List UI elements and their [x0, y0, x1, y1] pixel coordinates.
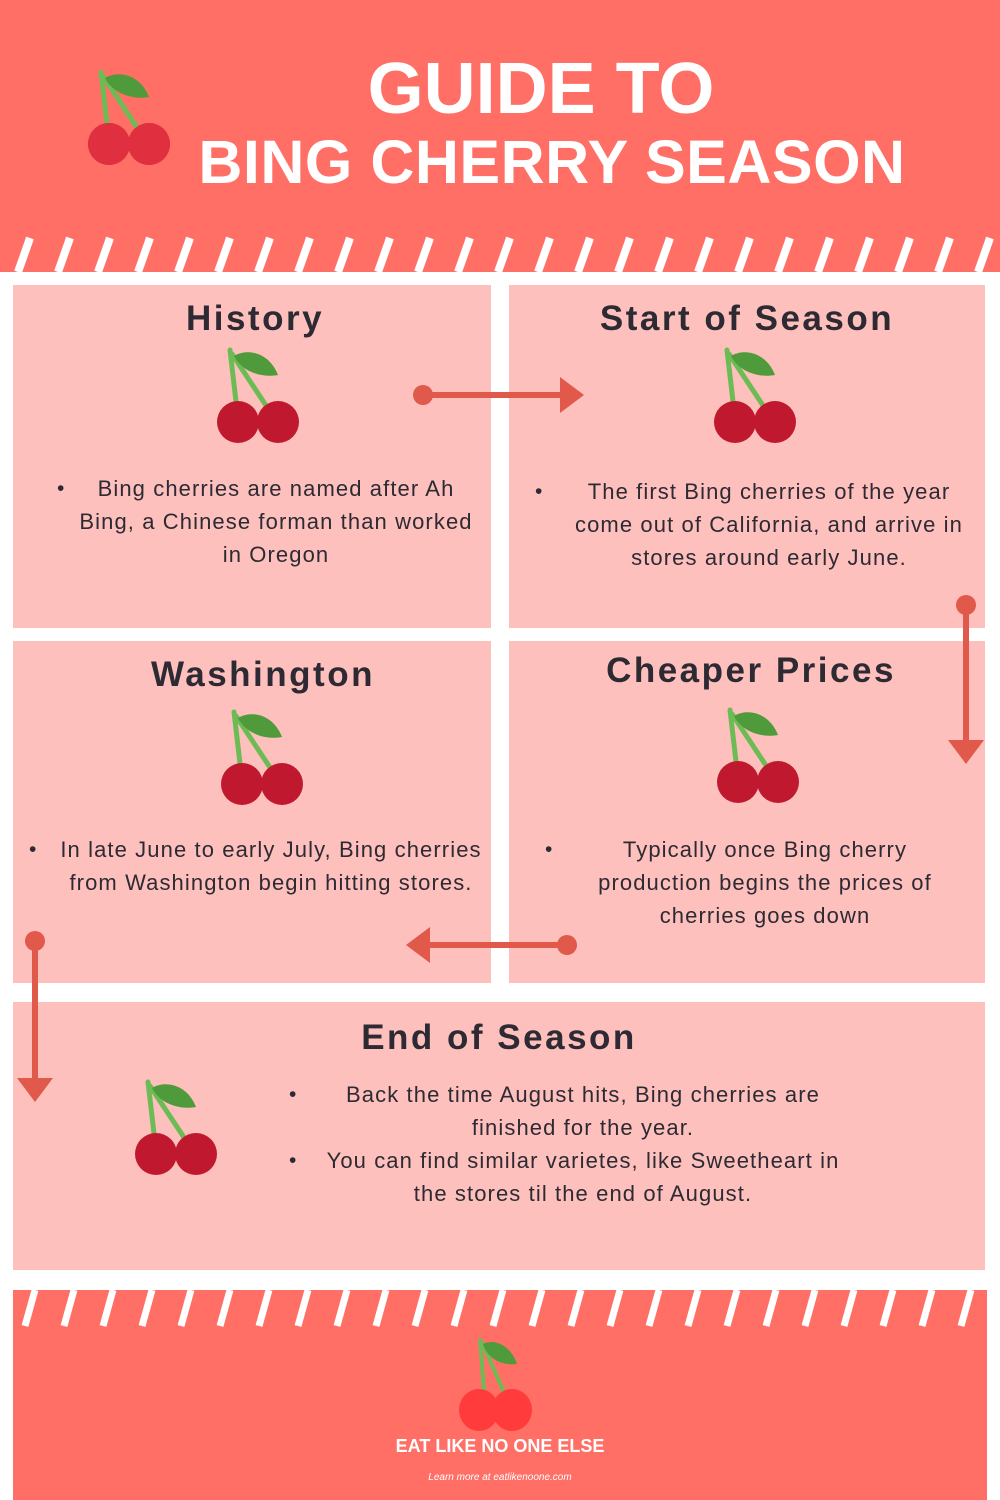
- heading: start of season: Start of Season: [600, 299, 894, 338]
- footer brand: EAT LIKE NO ONE ELSE: [396, 1436, 604, 1456]
- text: washington: from Washington begin hitting stores.: [69, 870, 473, 895]
- text: start: stores around early June.: [631, 545, 907, 570]
- panel: washington: [13, 641, 491, 983]
- icon: cherry: [217, 348, 299, 443]
- footer: [13, 1290, 987, 1500]
- text: cheaper: Typically once Bing cherry: [623, 837, 907, 862]
- icon: footer cherry: [459, 1338, 532, 1431]
- text: start: come out of California, and arrive in: [575, 512, 963, 537]
- text: history: Bing cherries are named after Ah: [98, 476, 454, 501]
- title: GUIDE TO: [368, 49, 714, 129]
- text: history: Bing, a Chinese forman than worked: [79, 509, 473, 534]
- text: start: The first Bing cherries of the year: [588, 479, 950, 504]
- text: history: •: [57, 477, 64, 500]
- text: cheaper: •: [545, 838, 552, 861]
- text: washington: In late June to early July, Bing cherries: [60, 837, 482, 862]
- text: cheaper: cherries goes down: [660, 903, 870, 928]
- text: end of season: finished for the year.: [472, 1115, 694, 1140]
- header: [0, 0, 1000, 272]
- heading: end of season: End of Season: [361, 1018, 637, 1057]
- icon: cherry: [717, 708, 799, 803]
- panel: cheaper prices: [509, 641, 985, 983]
- heading: history: History: [186, 299, 324, 338]
- footer link: Learn more at eatlikenoone.com: [428, 1472, 572, 1483]
- heading: cheaper prices: Cheaper Prices: [606, 651, 896, 690]
- text: end of season: You can find similar varietes, like Sweetheart in: [327, 1148, 839, 1173]
- panel: end of season: [13, 1002, 985, 1270]
- text: cheaper: [545, 837, 932, 928]
- title: BING CHERRY SEASON: [198, 128, 906, 196]
- icon: header cherry: [88, 70, 170, 165]
- icon: cherry: [135, 1080, 217, 1175]
- icon: cherry: [714, 348, 796, 443]
- text: washington: [29, 837, 482, 895]
- text: history: [57, 476, 473, 567]
- text: end of season: •: [289, 1149, 296, 1172]
- text: end of season: [289, 1082, 839, 1206]
- text: history: in Oregon: [223, 542, 329, 567]
- heading: washington: Washington: [151, 655, 375, 694]
- text: end of season: the stores til the end of August.: [414, 1181, 752, 1206]
- title: [198, 49, 906, 196]
- text: start: [535, 479, 963, 570]
- footer stripes: [22, 1290, 974, 1327]
- panel: history: [13, 285, 491, 628]
- text: washington: •: [29, 838, 36, 861]
- icon: cherry: [221, 710, 303, 805]
- text: end of season: Back the time August hits, Bing cherries are: [346, 1082, 820, 1107]
- text: cheaper: production begins the prices of: [598, 870, 932, 895]
- panel: start of season: [509, 285, 985, 628]
- text: start: •: [535, 480, 542, 503]
- header stripes: [14, 236, 994, 272]
- text: end of season: •: [289, 1083, 296, 1106]
